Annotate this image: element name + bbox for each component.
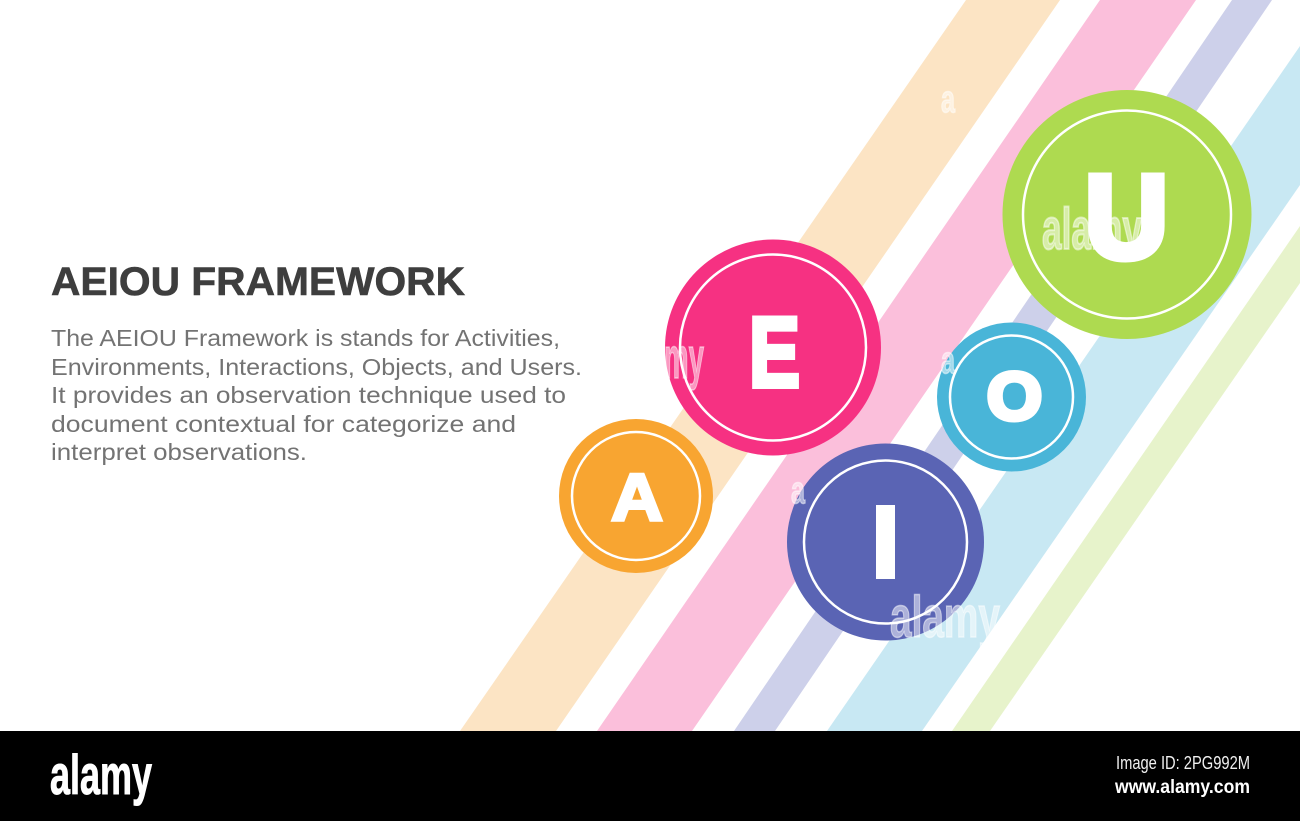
description text: document contextual for categorize and <box>51 411 516 437</box>
circle A <box>559 419 713 573</box>
circle A: A <box>611 460 663 536</box>
footer url: www.alamy.com <box>1114 777 1250 798</box>
description text: Environments, Interactions, Objects, and Users. <box>51 354 582 380</box>
diagonal stripes <box>460 0 1300 731</box>
circle O <box>937 322 1086 472</box>
footer logo: alamy <box>50 743 152 806</box>
circle E: E <box>749 296 800 408</box>
stock watermarks <box>664 79 1000 650</box>
stripe: purple <box>734 0 1272 731</box>
circle E <box>665 240 881 456</box>
stock watermarks: a <box>941 340 956 382</box>
circle O: O <box>987 360 1042 434</box>
stock watermark under letter: alamy <box>1042 197 1142 262</box>
circle U <box>1002 90 1252 339</box>
description text: The AEIOU Framework is stands for Activities, <box>51 325 560 351</box>
description text: interpret observations. <box>51 439 307 465</box>
stripe: green <box>952 226 1300 731</box>
circle U: U <box>1085 151 1168 284</box>
stock watermarks: my <box>664 326 704 391</box>
footer bar <box>0 731 1300 821</box>
description text: It provides an observation technique used to <box>51 382 566 408</box>
stock watermarks: a <box>791 470 806 512</box>
stock watermarks: alamy <box>890 585 1000 650</box>
description text <box>51 325 582 465</box>
stripe: blue <box>827 46 1300 731</box>
stripe: orange <box>460 0 1060 731</box>
stock watermarks: a <box>941 79 956 121</box>
title: AEIOU FRAMEWORK <box>51 260 465 304</box>
circle I <box>787 444 984 640</box>
footer image id: Image ID: 2PG992M <box>1116 753 1250 773</box>
stripe: pink <box>597 0 1196 731</box>
